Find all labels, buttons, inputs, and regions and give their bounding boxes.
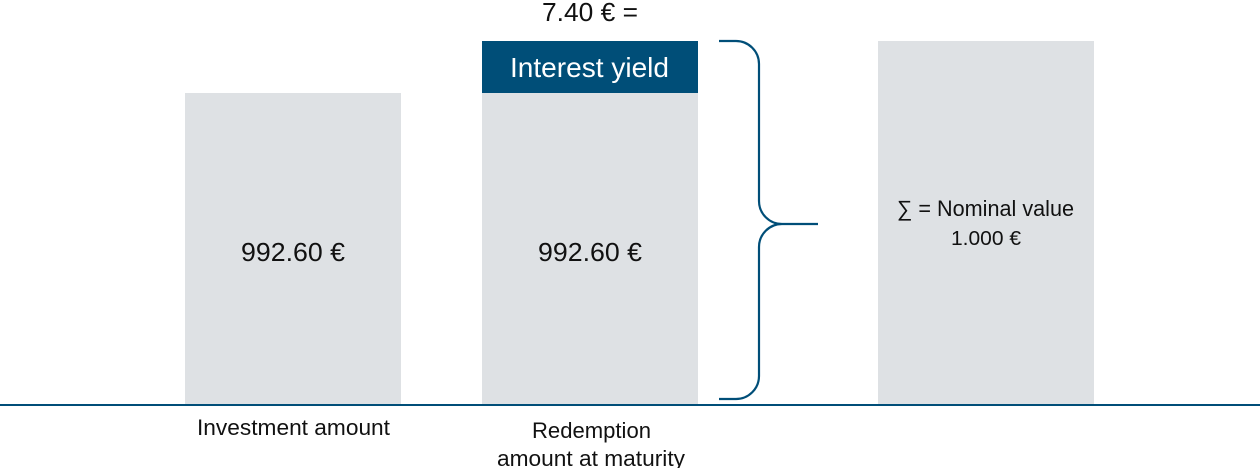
bar: nominal value: 1.000 € <box>951 228 1021 250</box>
bar: interest yield segment: Interest yield <box>510 52 669 83</box>
icon: curly brace <box>719 41 818 399</box>
bar: redemption amount <box>482 93 698 405</box>
bar: nominal value <box>878 41 1094 405</box>
bar: interest yield segment <box>482 41 698 93</box>
bar: investment amount: 992.60 € <box>241 237 346 267</box>
label: redemption amount at maturity: Redemption <box>532 418 651 443</box>
label: investment amount: Investment amount <box>197 415 390 440</box>
bar: investment amount <box>185 93 401 405</box>
bar: nominal value: ∑ = Nominal value <box>897 196 1074 221</box>
label: redemption amount at maturity <box>497 418 685 468</box>
baseline axis <box>0 404 1260 406</box>
bar: redemption amount: 992.60 € <box>538 237 643 267</box>
